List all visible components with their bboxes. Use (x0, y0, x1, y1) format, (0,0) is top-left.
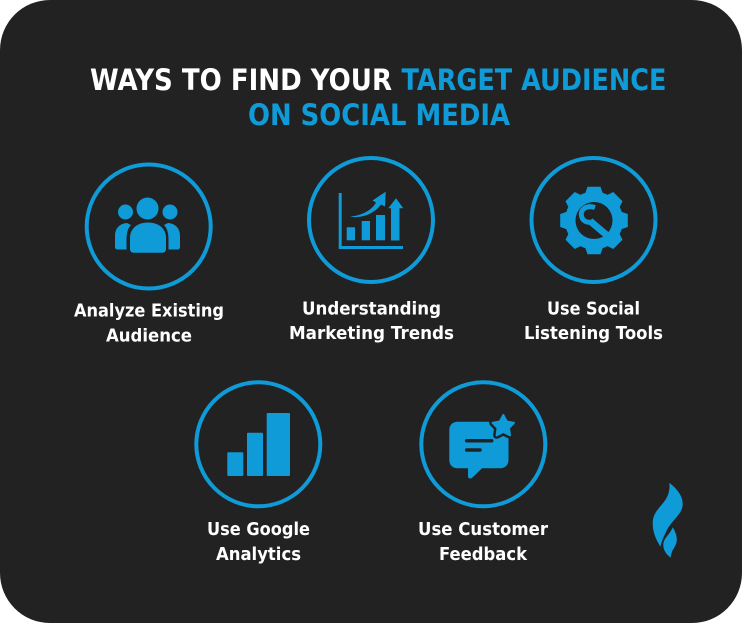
title: WAYS TO FIND YOUR (90, 63, 392, 97)
icon: rising chart (339, 192, 403, 249)
icon ring: audience (87, 164, 211, 288)
label: Use Google (207, 520, 310, 540)
icon ring: feedback (421, 382, 545, 506)
label: Analytics (216, 545, 301, 565)
label: Analyze Existing (74, 302, 224, 322)
title (90, 63, 666, 132)
icon ring: analytics (196, 382, 320, 506)
logo: flame (653, 483, 683, 558)
item: analyze existing audience (74, 164, 224, 346)
label: Audience (106, 326, 192, 346)
label: Understanding (302, 300, 441, 320)
title: TARGET AUDIENCE (402, 63, 666, 97)
item: use social listening tools (524, 158, 663, 344)
item: understanding marketing trends (289, 158, 454, 344)
label (207, 520, 310, 565)
label: Feedback (439, 545, 527, 565)
label: Use Social (547, 300, 640, 320)
label: Listening Tools (524, 324, 663, 344)
label: Use Customer (418, 520, 548, 540)
icon ring: trends (309, 158, 433, 282)
label (524, 300, 663, 344)
label: Marketing Trends (289, 324, 454, 344)
label (74, 302, 224, 346)
icon: gear and wrench (560, 187, 628, 254)
item: use customer feedback (418, 382, 548, 565)
title: ON SOCIAL MEDIA (248, 98, 510, 132)
icon: people group (115, 198, 180, 253)
icon ring: tools (532, 158, 656, 282)
item: use google analytics (196, 382, 320, 565)
label (418, 520, 548, 565)
icon: chat bubble with star (449, 415, 514, 479)
label (289, 300, 454, 344)
icon: bar chart (227, 413, 290, 476)
